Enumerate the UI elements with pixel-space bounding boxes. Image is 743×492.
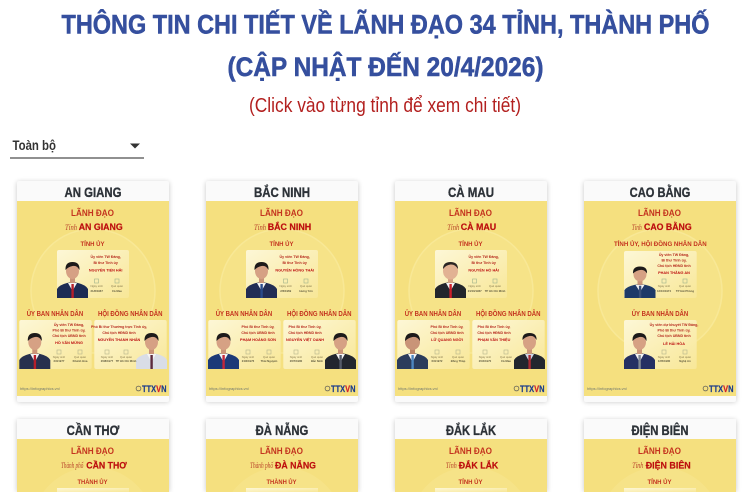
card: An Giang: [17, 181, 169, 402]
party secretary panel: Bí thư Tỉnh ủy: [283, 261, 307, 265]
poster: ĐÀ NẴNG: [275, 459, 316, 471]
party secretary panel: Ủy viên TW Đảng,: [469, 254, 499, 259]
poster: [17, 201, 169, 396]
people's committee panel: [624, 320, 698, 369]
people's committee panel: 2/4/1977: [54, 359, 65, 363]
people's committee panel: Ủy viên TW Đảng,: [54, 322, 84, 327]
portrait: [624, 266, 656, 298]
news agency logo: TTXVN: [520, 384, 544, 394]
party secretary panel: Quê quán: [679, 284, 692, 288]
poster: HỘI ĐỒNG NHÂN DÂN: [476, 308, 540, 318]
people's committee panel: [19, 320, 92, 369]
poster: [584, 439, 736, 492]
party secretary panel: Quê quán: [489, 284, 502, 288]
people's committee panel: Ngày sinh: [242, 355, 255, 359]
party secretary panel: NGUYỄN HỒNG THÁI: [275, 268, 314, 272]
poster: BẮC NINH: [268, 222, 311, 233]
party secretary panel: Bí thư Tỉnh ủy: [94, 261, 118, 265]
portrait: [514, 333, 545, 369]
party secretary panel: [624, 251, 697, 298]
poster: CAO BẰNG: [644, 222, 692, 233]
people's committee panel: Quê quán: [679, 355, 692, 359]
people's committee panel: Ngày sinh: [431, 355, 444, 359]
card: Cần Thơ: [17, 419, 169, 492]
party secretary panel: TP Hồ Chí Minh: [485, 289, 506, 293]
people's committee panel: 12/5/1980: [658, 359, 671, 363]
party secretary panel: [435, 250, 507, 298]
people's committee panel: Phó Bí thư Tỉnh ủy,: [658, 328, 690, 332]
poster: [17, 439, 169, 492]
portrait: [624, 333, 655, 369]
card: Bắc Ninh: [206, 181, 358, 402]
poster: TỈNH ỦY: [648, 477, 672, 486]
party secretary panel: [246, 250, 318, 298]
poster: LÃNH ĐẠO: [449, 446, 492, 456]
people's committee panel: Ủy viên dự khuyết TW Đảng,: [650, 322, 698, 327]
subtitle: (Click vào từng tỉnh để xem chi tiết): [249, 95, 521, 117]
poster: TỈNH ỦY, HỘI ĐỒNG NHÂN DÂN: [614, 238, 707, 248]
party secretary panel: Ngày sinh: [658, 284, 671, 288]
party secretary panel: Ngày sinh: [90, 284, 103, 288]
poster: ỦY BAN NHÂN DÂN: [27, 309, 83, 318]
people's committee panel: [208, 320, 281, 369]
party secretary panel: Bí thư Tỉnh ủy,: [661, 258, 687, 262]
card: Cao Bằng: [584, 181, 736, 402]
party secretary panel: Ủy viên TW Đảng,: [91, 254, 121, 259]
people's committee panel: Quê quán: [263, 355, 276, 359]
people's council panel: [472, 320, 545, 369]
people's committee panel: Quê quán: [74, 355, 87, 359]
portrait: [136, 333, 167, 369]
party secretary panel: NGUYỄN HỒ HẢI: [468, 268, 499, 272]
people's committee panel: Chủ tịch UBND tỉnh: [52, 334, 86, 338]
portrait: [435, 262, 466, 298]
title: [62, 8, 710, 82]
poster: https://infographics.vn/: [20, 386, 61, 391]
card heading: AN GIANG: [64, 184, 122, 200]
poster: Tỉnh: [65, 223, 77, 232]
party secretary panel: TP Hải Phòng: [676, 289, 694, 293]
people's council panel: Ngày sinh: [479, 355, 492, 359]
people's council panel: NGUYỄN VIỆT OANH: [286, 337, 324, 342]
people's committee panel: Đồng Tháp: [451, 359, 466, 363]
people's council panel: Phó Bí thư Tỉnh ủy,: [478, 325, 510, 329]
poster: HỘI ĐỒNG NHÂN DÂN: [98, 308, 162, 318]
people's council panel: Chủ tịch HĐND tỉnh: [102, 331, 136, 335]
poster: LÃNH ĐẠO: [449, 208, 492, 218]
poster: [395, 201, 547, 396]
people's committee panel: Khánh Hòa: [73, 359, 88, 363]
people's committee panel: 24/2/1976: [242, 359, 255, 363]
poster: CẦN THƠ: [86, 460, 128, 471]
party secretary panel: Ủy viên TW Đảng,: [280, 254, 310, 259]
card heading: ĐẮK LẮK: [446, 421, 496, 438]
poster: Tỉnh: [446, 461, 457, 470]
party secretary panel: Hưng Yên: [299, 289, 313, 293]
people's council panel: Chủ tịch HĐND tỉnh: [477, 331, 511, 335]
poster: [395, 439, 547, 492]
people's committee panel: Phó Bí thư Tỉnh ủy,: [431, 325, 463, 329]
people's council panel: PHẠM VĂN THIỆU: [478, 337, 511, 342]
people's committee panel: Phó Bí thư Tỉnh ủy,: [53, 328, 85, 332]
card: Cà Mau: [395, 181, 547, 402]
party secretary panel: Cà Mau: [112, 289, 122, 293]
people's council panel: TP Hồ Chí Minh: [116, 359, 137, 363]
people's committee panel: LÊ HẢI HÒA: [663, 341, 685, 346]
poster: THÀNH ỦY: [266, 477, 297, 486]
portrait: [246, 262, 277, 298]
people's council panel: [283, 320, 356, 369]
poster: LÃNH ĐẠO: [260, 446, 303, 456]
card heading: CẦN THƠ: [67, 422, 119, 438]
poster: ỦY BAN NHÂN DÂN: [405, 309, 461, 318]
people's council panel: Bắc Ninh: [311, 358, 323, 363]
people's committee panel: Ngày sinh: [658, 355, 671, 359]
card heading: ĐIỆN BIÊN: [632, 421, 688, 438]
people's committee panel: [397, 320, 470, 369]
portrait: [57, 262, 88, 298]
party secretary panel: [57, 250, 129, 298]
portrait: [19, 333, 50, 369]
card: Đà Nẵng: [206, 419, 358, 492]
people's committee panel: LỮ QUANG NGỜI: [431, 337, 463, 342]
poster: Thành phố: [250, 461, 274, 470]
people's committee panel: Chủ tịch UBND tỉnh: [241, 331, 275, 335]
people's council panel: Phó Bí thư Tỉnh ủy,: [289, 325, 321, 329]
party secretary panel: Chủ tịch HĐND tỉnh: [657, 264, 691, 268]
poster: ỦY BAN NHÂN DÂN: [632, 309, 688, 318]
people's council panel: 20/4/1970: [479, 359, 492, 363]
people's committee panel: PHẠM HOÀNG SƠN: [240, 337, 276, 342]
people's council panel: NGUYỄN THANH NHÂN: [98, 337, 141, 342]
card: Điện Biên: [584, 419, 736, 492]
party secretary panel: Quê quán: [111, 284, 124, 288]
people's council panel: Phó Bí thư Thường trực Tỉnh ủy,: [91, 325, 147, 329]
poster: LÃNH ĐẠO: [638, 208, 681, 218]
poster: ĐẮK LẮK: [459, 460, 498, 471]
dropdown filter: [10, 137, 144, 158]
poster: TỈNH ỦY: [270, 239, 294, 248]
party secretary panel: Ủy viên TW Đảng,: [659, 252, 689, 257]
card heading: CÀ MAU: [448, 184, 494, 200]
people's committee panel: 6/4/1972: [432, 359, 443, 363]
people's council panel: 26/7/1980: [290, 359, 303, 363]
poster: https://infographics.vn/: [209, 386, 250, 391]
people's council panel: Quê quán: [311, 355, 324, 359]
people's council panel: 20/8/1977: [101, 359, 114, 363]
portrait: [325, 333, 356, 369]
news agency logo: TTXVN: [331, 384, 356, 394]
portrait: [397, 333, 428, 369]
poster: ỦY BAN NHÂN DÂN: [216, 309, 272, 318]
party secretary panel: PHAN THĂNG AN: [658, 270, 690, 275]
card heading: BẮC NINH: [254, 183, 310, 200]
news agency logo: TTXVN: [709, 384, 734, 394]
poster: TỈNH ỦY: [458, 477, 483, 486]
poster: TỈNH ỦY: [458, 239, 483, 248]
poster: [206, 439, 358, 492]
poster: Tỉnh: [632, 461, 643, 470]
card: Đắk Lắk: [395, 419, 547, 492]
poster: Tỉnh: [254, 223, 266, 232]
party secretary panel: Bí thư Tỉnh ủy: [472, 261, 496, 265]
party secretary panel: 12/10/1974: [657, 289, 671, 293]
poster: AN GIANG: [79, 222, 123, 233]
title: (CẬP NHẬT ĐẾN 20/4/2026): [228, 51, 544, 82]
people's committee panel: Nghệ An: [679, 359, 691, 363]
party secretary panel: Ngày sinh: [468, 284, 481, 288]
people's committee panel: Ngày sinh: [53, 355, 66, 359]
party secretary panel: Ngày sinh: [279, 284, 292, 288]
people's committee panel: Thái Nguyên: [261, 359, 278, 363]
people's council panel: Ngày sinh: [101, 355, 114, 359]
people's council panel: Quê quán: [500, 355, 513, 359]
people's committee panel: Chủ tịch UBND tỉnh: [430, 331, 464, 335]
poster: HỘI ĐỒNG NHÂN DÂN: [287, 308, 352, 318]
poster: LÃNH ĐẠO: [71, 446, 114, 456]
poster: LÃNH ĐẠO: [71, 208, 114, 218]
poster: ĐIỆN BIÊN: [646, 459, 691, 471]
party secretary panel: 24/10/1967: [468, 289, 482, 293]
poster: Tỉnh: [447, 223, 459, 232]
card heading: ĐÀ NẴNG: [256, 422, 308, 438]
people's committee panel: Quê quán: [452, 355, 465, 359]
news agency logo: TTXVN: [142, 384, 166, 394]
portrait: [208, 333, 239, 369]
poster: [206, 201, 358, 396]
poster: [584, 201, 736, 396]
party secretary panel: 2/6/1969: [280, 289, 292, 293]
people's committee panel: Chủ tịch UBND tỉnh: [657, 334, 691, 338]
poster: https://infographics.vn/: [587, 386, 628, 391]
dropdown filter: Toàn bộ: [12, 137, 56, 153]
people's committee panel: Phó Bí thư Tỉnh ủy,: [242, 325, 274, 329]
party secretary panel: NGUYỄN TIẾN HẢI: [89, 268, 122, 272]
poster: THÀNH ỦY: [78, 477, 108, 486]
poster: Thành phố: [61, 461, 84, 470]
card heading: CAO BẰNG: [630, 183, 690, 200]
people's council panel: Quê quán: [120, 355, 133, 359]
people's council panel: [91, 320, 167, 369]
people's council panel: Cà Mau: [501, 359, 511, 363]
people's committee panel: HỒ VĂN MỪNG: [55, 340, 83, 345]
people's council panel: Chủ tịch HĐND tỉnh: [288, 331, 322, 335]
party secretary panel: 21/8/1967: [90, 289, 103, 293]
poster: Tỉnh: [632, 223, 642, 232]
poster: LÃNH ĐẠO: [260, 208, 303, 218]
party secretary panel: Quê quán: [300, 284, 313, 288]
poster: https://infographics.vn/: [398, 386, 439, 391]
poster: CÀ MAU: [461, 222, 496, 233]
people's council panel: Ngày sinh: [290, 355, 303, 359]
poster: LÃNH ĐẠO: [638, 446, 681, 456]
poster: TỈNH ỦY: [80, 239, 105, 248]
